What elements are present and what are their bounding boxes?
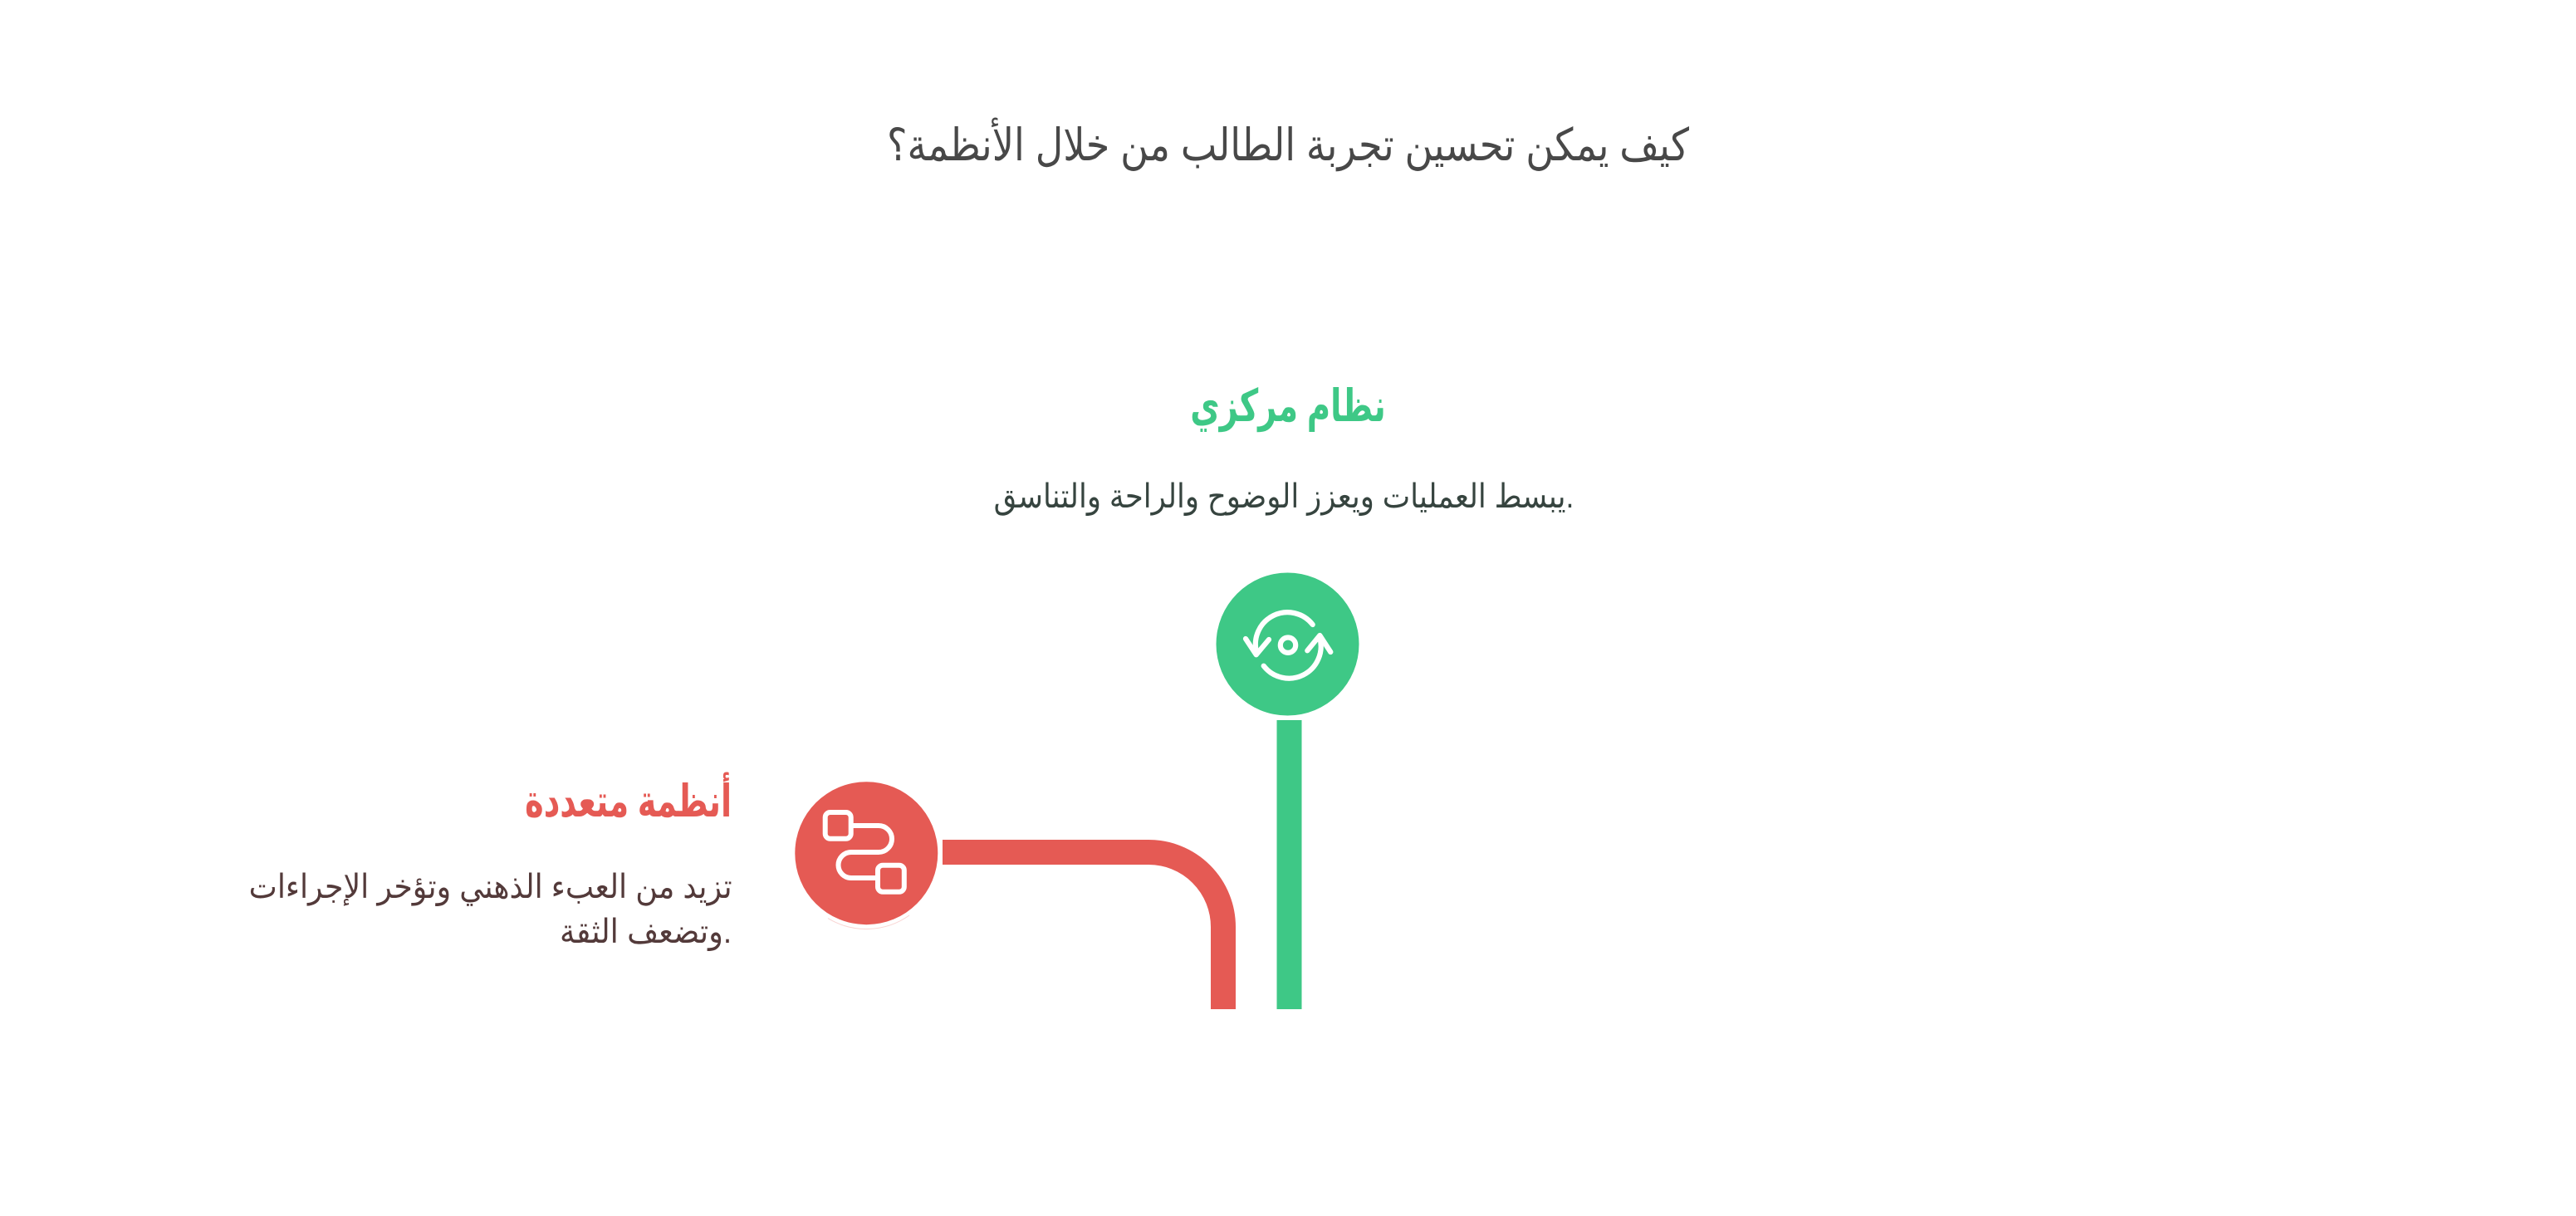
connector: red path [943, 852, 1223, 1009]
text: multiple systems description [249, 869, 732, 951]
title: كيف يمكن تحسين تجربة الطالب من خلال الأنظمة؟ [887, 120, 1689, 170]
text: multiple systems description: وتضعف الثقة. [560, 914, 732, 950]
heading: multiple systems: أنظمة متعددة [525, 777, 732, 826]
icon: green sync circle [1216, 573, 1359, 716]
text: multiple systems description: تزيد من العبء الذهني وتؤخر الإجراءات [249, 869, 732, 905]
icon: red flow circle [795, 782, 938, 929]
text: central system description: يبسط العمليات ويعزز الوضوح والراحة والتناسق. [994, 478, 1574, 515]
heading: central system: نظام مركزي [1190, 381, 1386, 431]
connector: green bar [1277, 720, 1302, 1009]
